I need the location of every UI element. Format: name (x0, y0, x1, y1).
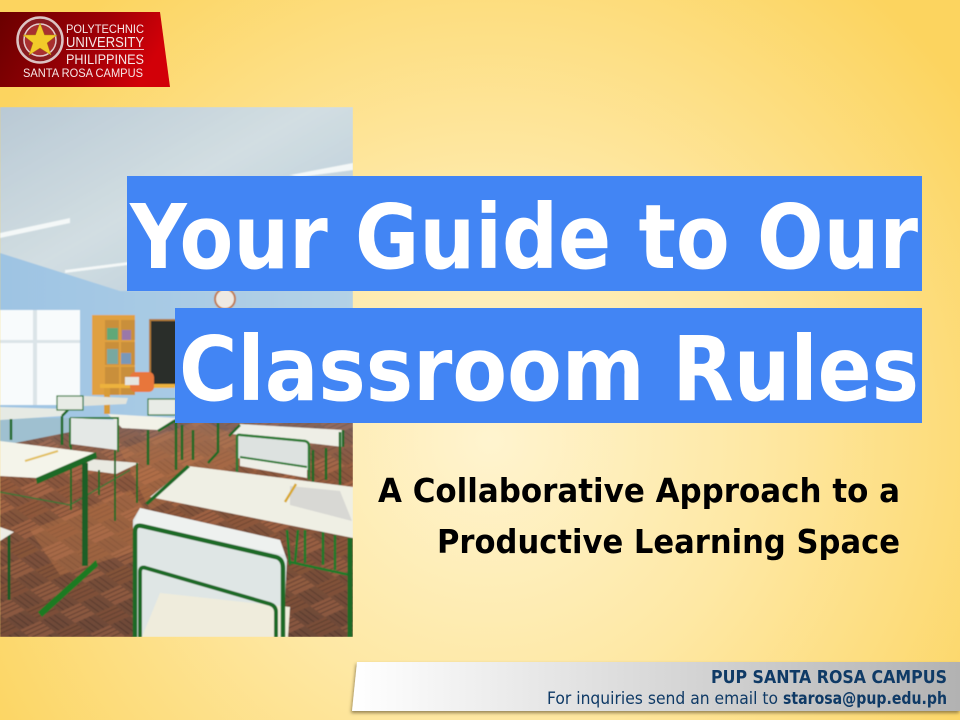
photo: front chair (133, 508, 290, 637)
photo: ceiling lights (0, 163, 353, 273)
photo: sunlit floor patches (30, 423, 240, 575)
photo: back left desks (0, 396, 176, 445)
footer bar (352, 662, 960, 711)
photo: floor reflection (0, 418, 70, 444)
subtitle: Productive Learning Space (437, 522, 900, 561)
logo wordmark: PHILIPPINES (66, 51, 144, 67)
logo wordmark: SANTA ROSA CAMPUS (23, 68, 143, 80)
photo: middle desk and chair (70, 414, 218, 521)
icon: university seal (18, 18, 62, 62)
photo: teacher desk (100, 372, 175, 414)
photo: front right desk (145, 465, 353, 637)
logo banner (0, 12, 170, 87)
photo: bookshelf (92, 315, 135, 395)
photo: front left desk (0, 441, 130, 617)
photo: right rear desk and chair (229, 424, 343, 485)
logo wordmark: POLYTECHNIC (66, 24, 144, 36)
footer contact line (547, 689, 947, 709)
subtitle: A Collaborative Approach to a (378, 471, 900, 510)
subtitle (378, 471, 900, 561)
logo wordmark (23, 24, 144, 80)
photo: chalkboard (150, 320, 180, 385)
photo: windows (0, 310, 80, 405)
photo: floor shading (0, 420, 353, 637)
footer contact line: For inquiries send an email to (547, 689, 778, 709)
logo wordmark: UNIVERSITY (66, 35, 144, 51)
photo: clock (215, 289, 235, 309)
photo: ceiling (0, 107, 353, 307)
classroom photo (0, 107, 353, 637)
photo: wall (0, 253, 353, 421)
photo: floor (0, 420, 353, 637)
